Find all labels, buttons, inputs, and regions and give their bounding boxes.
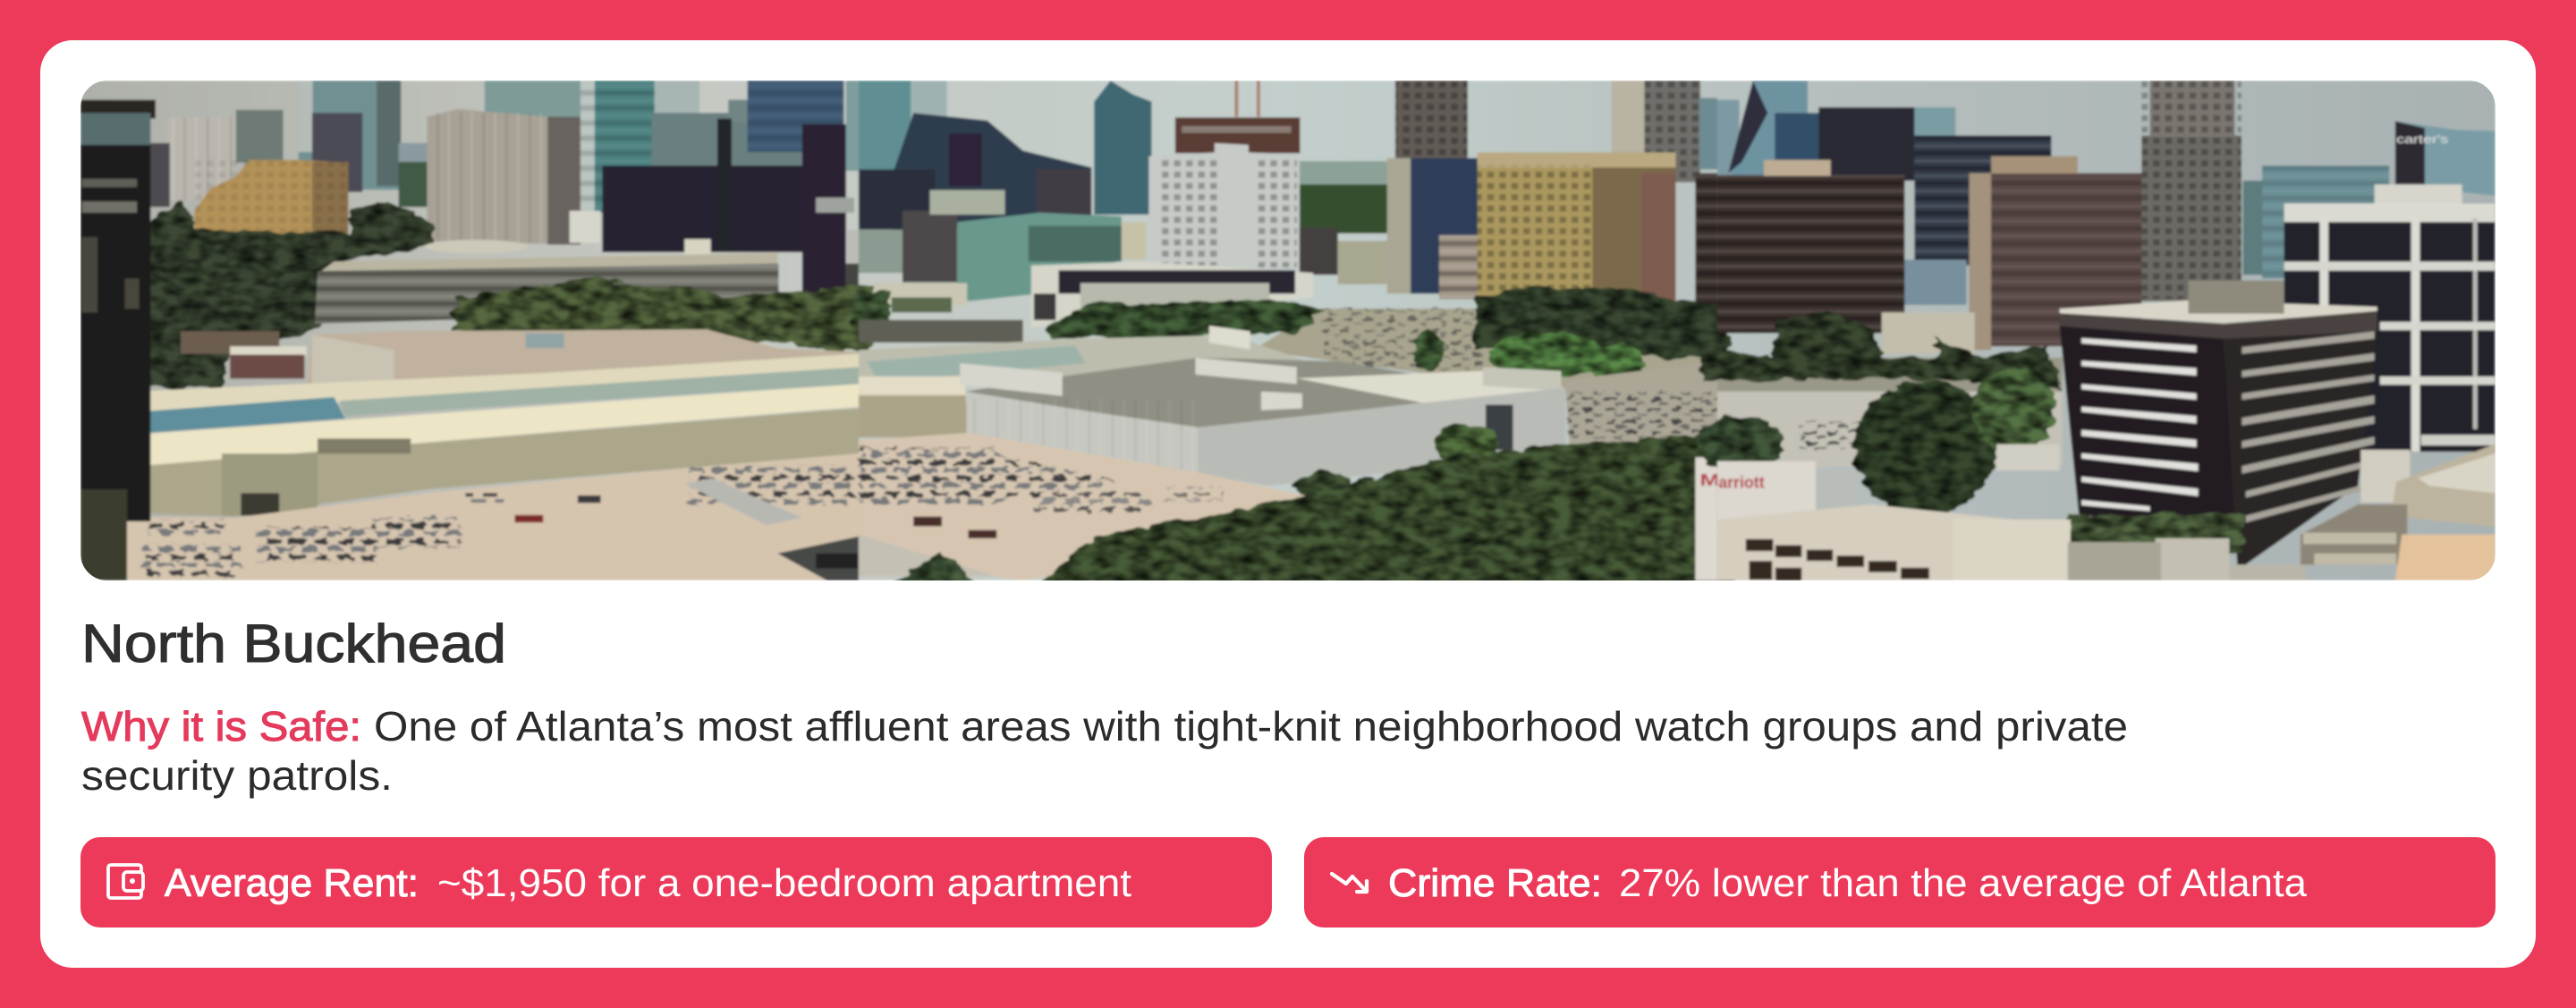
icon: trending down arrow [1332, 874, 1367, 892]
macys [966, 358, 1420, 428]
text block: why it is safe: security patrols. [81, 752, 393, 799]
parking lot [123, 453, 859, 580]
far right lot [1565, 367, 1719, 446]
photo: Buckhead skyline and mall [80, 80, 2496, 602]
low striped building [424, 240, 529, 253]
stat pill: crime rate: 27% lower than the average of Atlanta [1619, 861, 2308, 905]
trees [131, 199, 433, 388]
rooftop complex [181, 331, 279, 354]
stat pill: average rent: Average Rent: [165, 861, 419, 905]
text block: why it is safe [81, 703, 2128, 799]
stat pill: crime rate [1304, 837, 2496, 928]
stat pill: crime rate: Crime Rate: [1388, 861, 1602, 905]
photo right section: carter's [2396, 134, 2448, 146]
stat pill: average rent: ~$1,950 for a one-bedroom apartment [437, 861, 1131, 905]
icon: wallet [108, 865, 143, 898]
right low structures [2360, 450, 2410, 503]
heading: North Buckhead: North Buckhead [81, 614, 506, 673]
photo left section [80, 80, 870, 580]
photo right section: arriott [1718, 473, 1765, 491]
trees behind macys [1047, 300, 1326, 339]
white framed glass building [2284, 203, 2495, 452]
stat pill: average rent [80, 837, 1272, 928]
marriott building [1716, 459, 1817, 521]
photo middle section [853, 80, 1735, 602]
far parking [1253, 309, 1717, 392]
far lot and trees [1882, 312, 1975, 354]
text block: why it is safe: Why it is Safe: [81, 703, 361, 750]
dark glass tower left [80, 100, 156, 119]
front parking [859, 433, 1329, 580]
photo middle section: M [1699, 470, 1720, 489]
roof [857, 334, 1302, 377]
foreground trees [1040, 433, 1737, 580]
photo right section [1696, 80, 2495, 580]
text block: why it is safe: One of Atlanta’s most affluent areas with tight-knit neighborhood watch groups and private [374, 703, 2128, 750]
dark foreground building [2060, 301, 2377, 323]
